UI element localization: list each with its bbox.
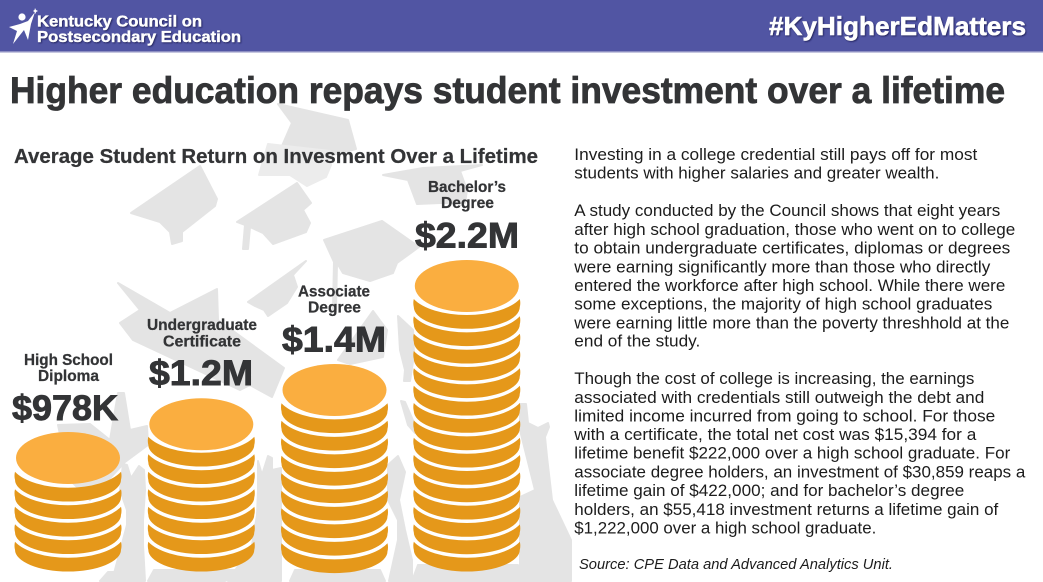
organisation name [37, 14, 241, 46]
label: high school diploma [24, 352, 113, 385]
coin stack chart [12, 179, 520, 573]
organisation name: Kentucky Council on [37, 14, 202, 30]
raised hand behind first stack [58, 393, 148, 500]
label: high school diploma: High School [24, 352, 113, 369]
label: undergraduate certificate: Certificate [163, 334, 241, 351]
text block: study paragraph: were earning little more than the poverty threshhold at the [573, 313, 1009, 332]
hashtag: #KyHigherEdMatters [769, 11, 1026, 41]
label: bachelor's degree [428, 179, 506, 212]
cap small middle [248, 261, 306, 316]
text block: cost paragraph: $1,222,000 over a high school graduate. [574, 519, 876, 538]
arm under second stack [148, 570, 250, 581]
arm under fourth stack [412, 565, 521, 581]
stack: high school diploma [12, 352, 122, 572]
label: high school diploma: Diploma [38, 368, 99, 385]
text block: intro paragraph: students with higher salaries and greater wealth. [574, 164, 939, 182]
text block: cost paragraph: Though the cost of college is increasing, the earnings [574, 369, 974, 388]
text block: study paragraph: entered the workforce after high school. While there were [574, 276, 1005, 295]
text block: study paragraph: after high school graduation, those who went on to college [574, 220, 1015, 239]
text block: cost paragraph: with a certificate, the total net cost was $15,394 for a [573, 425, 977, 444]
large cap left [118, 283, 284, 397]
raised hand between stacks two and three [228, 456, 281, 581]
coins: associate degree [281, 364, 388, 573]
cap top left [131, 166, 217, 244]
label: associate degree: Associate [298, 284, 370, 301]
text block: study paragraph: end of the study. [574, 332, 700, 351]
text block: cost paragraph: holders, an $55,418 investment returns a lifetime gain of [574, 500, 999, 519]
text block: cost paragraph [573, 369, 1026, 538]
arm under third and fourth stacks [290, 570, 385, 581]
label: bachelor's degree: Degree [441, 195, 494, 212]
label: bachelor's degree: Bachelor’s [428, 179, 506, 196]
value: $2.2M: $2.2M [415, 217, 519, 256]
raised hand upper between stacks [401, 401, 415, 433]
text block: cost paragraph: lifetime benefit $222,000 over a high school graduate. For [574, 444, 1011, 463]
stack: undergraduate certificate [147, 317, 257, 572]
stack: bachelor's degree [413, 179, 520, 572]
cap top right [383, 165, 482, 204]
background silhouettes: graduation caps and raised hands [58, 104, 571, 581]
raised hand between stacks three and four [388, 456, 412, 581]
source note: Source: CPE Data and Advanced Analytics Unit. [579, 557, 893, 573]
chart heading: Average Student Return on Invesment Over a Lifetime [14, 146, 538, 168]
cap behind associate label [338, 311, 387, 364]
text block: cost paragraph: associate degree holders, an investment of $30,859 reaps a [574, 462, 1026, 482]
cap top centre crown [278, 104, 356, 157]
coins: high school diploma [14, 432, 122, 572]
coins: bachelor's degree [413, 260, 520, 572]
organisation name: Postsecondary Education [37, 29, 241, 46]
title: Higher education repays student investment over a lifetime [10, 70, 1005, 111]
stack: associate degree [281, 284, 388, 573]
raised hand between stacks one and two [112, 464, 145, 581]
cap top centre board [259, 144, 331, 186]
icon: star person logo [9, 8, 38, 44]
text block: intro paragraph: Investing in a college credential still pays off for most [574, 145, 978, 164]
label: associate degree [298, 284, 370, 317]
text block: cost paragraph: associated with credentials still outweigh the debt and [574, 388, 984, 407]
coins: undergraduate certificate [148, 398, 255, 572]
text block: study paragraph: to obtain undergraduate certificates, diplomas or degrees [574, 238, 1010, 257]
label: undergraduate certificate: Undergraduate [147, 317, 257, 334]
text block: study paragraph [573, 201, 1015, 351]
label: associate degree: Degree [308, 300, 361, 317]
label: undergraduate certificate [147, 317, 257, 351]
lower arms under stacks [100, 572, 143, 581]
text block: study paragraph: A study conducted by the Council shows that eight years [574, 201, 1000, 220]
value: $1.2M: $1.2M [149, 354, 253, 393]
cap centre [324, 221, 419, 309]
text block: intro paragraph [574, 145, 978, 182]
hand blob right of associate value [398, 316, 414, 381]
text block: cost paragraph: limited income incurred from going to school. For those [574, 407, 995, 426]
text block: study paragraph: some exceptions, the majority of high school graduates [574, 294, 992, 313]
text block: study paragraph: were earning significantly more than those who directly [573, 257, 991, 276]
text block: cost paragraph: lifetime gain of $422,000; and for bachelor’s degree [574, 481, 964, 500]
value: $978K: $978K [12, 389, 118, 428]
header bar [0, 0, 1043, 52]
value: $1.4M: $1.4M [282, 321, 386, 360]
raised hand far right [520, 404, 571, 581]
cap with tassel [237, 183, 311, 249]
